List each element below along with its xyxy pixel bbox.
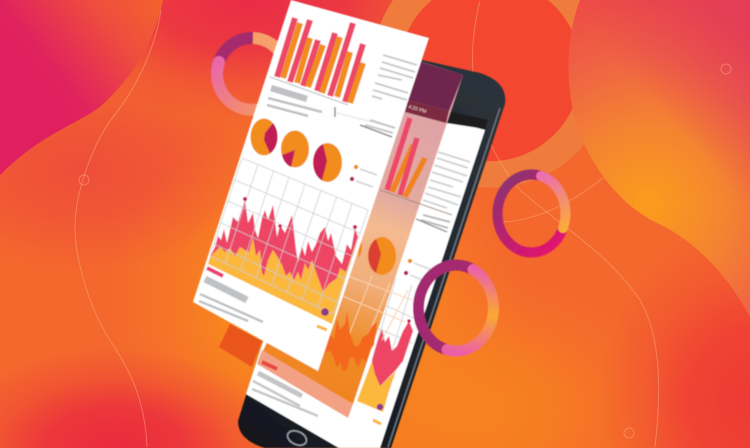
donut ring: lower	[418, 265, 494, 351]
chart peak markers	[243, 197, 357, 229]
footer text block	[199, 279, 263, 322]
small table lines	[335, 107, 395, 137]
translucent sheet overlay	[257, 55, 463, 418]
background blob: top left magenta	[0, 0, 163, 175]
overlay header	[408, 60, 463, 111]
pie chart 2	[281, 130, 309, 168]
dark orange square behind sheet	[219, 324, 262, 367]
donut ring: right	[498, 174, 566, 252]
screen legend	[404, 259, 432, 282]
chart badge	[321, 308, 329, 316]
overlay body	[262, 55, 463, 404]
bar chart	[270, 18, 363, 105]
sheet page	[193, 0, 429, 371]
home button	[285, 428, 309, 448]
overlay salmon footer	[257, 350, 353, 418]
red label	[207, 268, 223, 276]
screen grid	[370, 278, 418, 375]
overlay chart axis	[380, 190, 452, 215]
main report sheet	[193, 0, 429, 371]
status band	[446, 111, 488, 129]
area chart: yellow series	[208, 238, 357, 324]
text lines beside bars	[372, 55, 417, 100]
phone edge highlight	[388, 108, 500, 447]
background disc: red circle behind phone	[399, 0, 581, 161]
background ring: behind phone	[372, 0, 590, 188]
status time: 4:20 PM	[407, 104, 427, 115]
overlay status band	[405, 100, 449, 123]
phone	[238, 45, 505, 448]
pie chart 1	[250, 118, 278, 156]
pie chart 3	[313, 143, 342, 182]
area chart: red series	[210, 200, 358, 292]
orange tag	[317, 326, 327, 330]
caption block below bars	[267, 88, 322, 116]
overlay bar chart	[387, 118, 425, 197]
overlay footer tag	[262, 362, 277, 369]
overlay area chart	[325, 311, 377, 371]
phone screen	[246, 92, 485, 448]
screen area chart	[357, 319, 413, 424]
screen text lines	[423, 152, 470, 208]
overlay pie chart	[358, 237, 396, 275]
screen footer text lines	[252, 373, 318, 416]
background blob: top right orange	[568, 0, 750, 317]
donut ring: top left	[217, 38, 285, 110]
phone body	[238, 45, 505, 448]
chart grid	[210, 158, 368, 314]
pie legend	[350, 165, 377, 187]
screen small lines	[416, 215, 450, 232]
overlay grid	[340, 275, 412, 350]
